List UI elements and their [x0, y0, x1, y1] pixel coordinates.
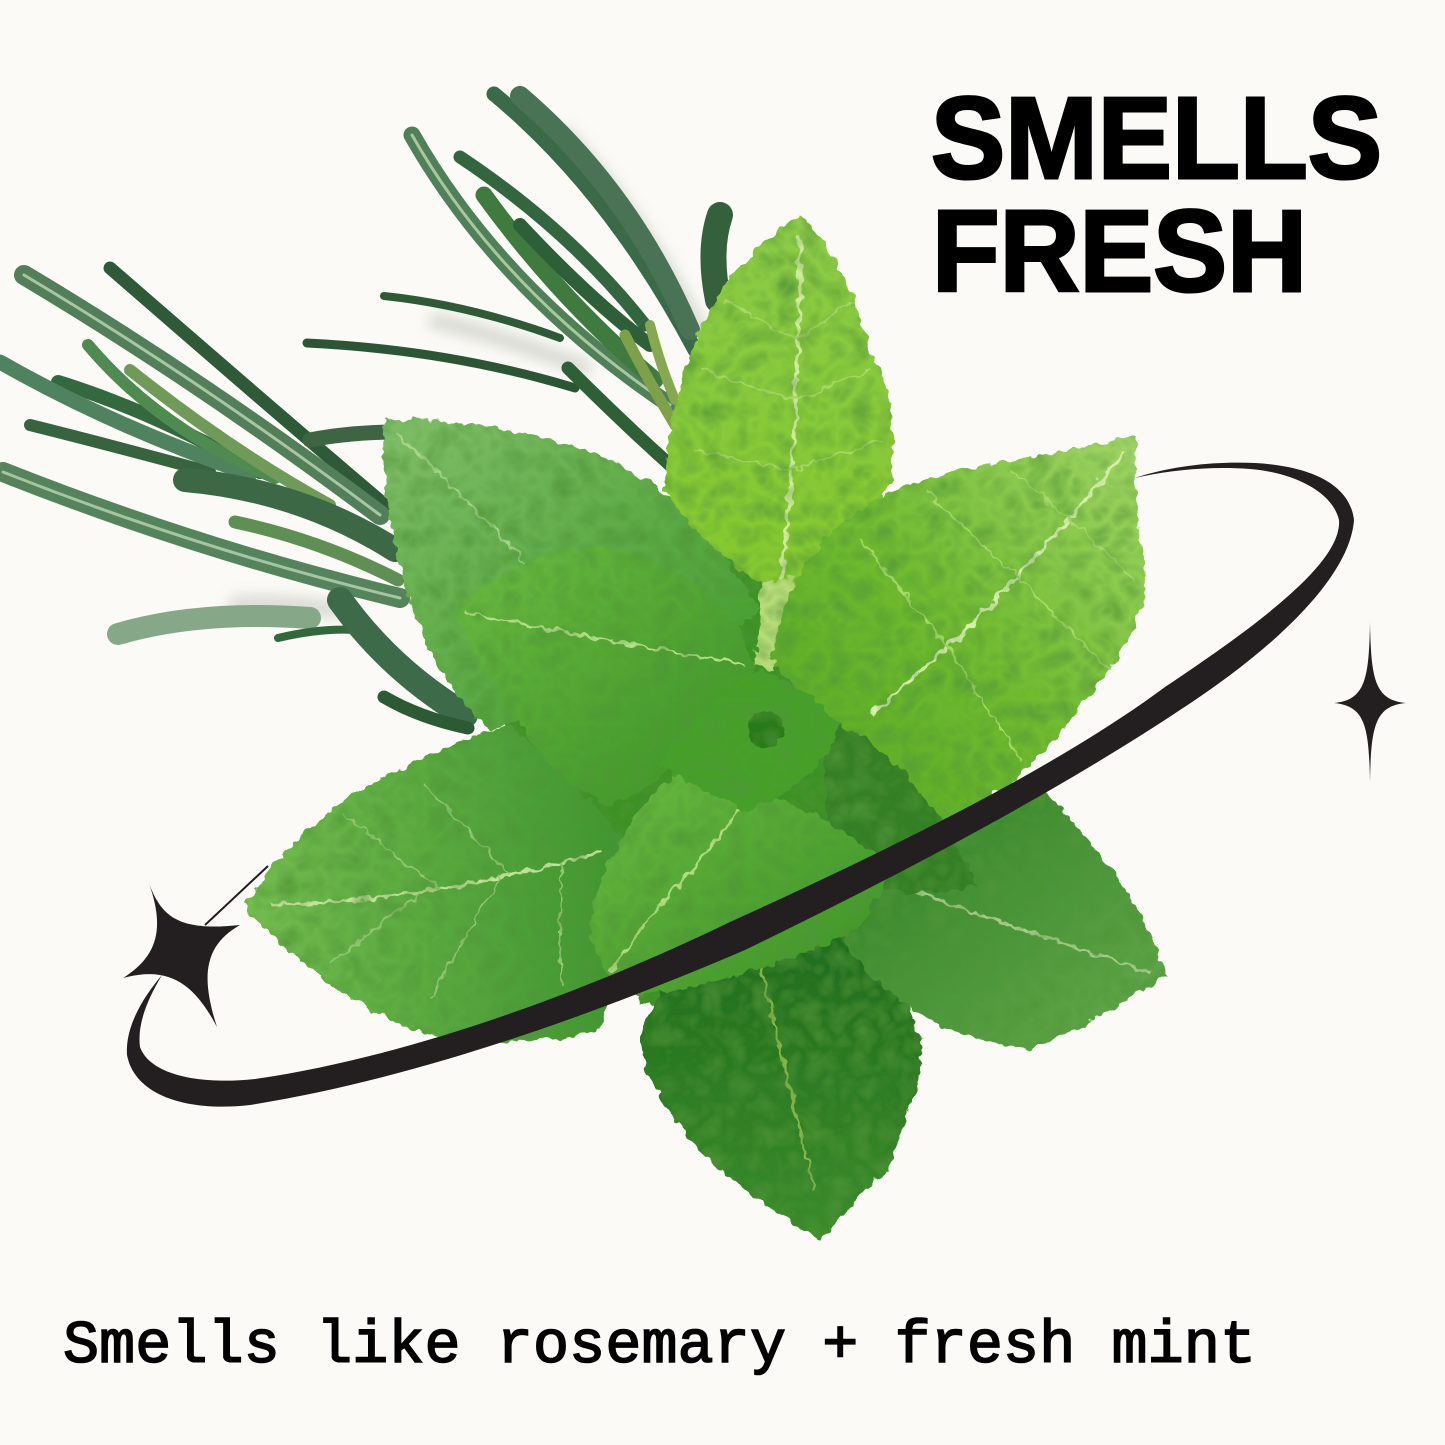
upper sprig needles: [307, 94, 720, 465]
leaf underlay: [470, 470, 980, 1005]
icon: large four-point star: [123, 878, 240, 1027]
caption: Smells like rosemary + fresh mint: [63, 1313, 1256, 1381]
rosemary sprigs: [0, 94, 720, 728]
leaf: right large: [772, 437, 1146, 825]
title: SMELLS: [931, 73, 1382, 203]
icon: small sparkle: [1334, 622, 1406, 782]
leaf: top: [665, 215, 894, 600]
leaf: dark right small: [823, 720, 977, 892]
leaf: center cluster: [660, 668, 838, 812]
stem: [755, 575, 795, 670]
leaf: lower right: [845, 780, 1167, 1050]
leaf: lower left: [243, 725, 630, 1042]
leaf: bottom dark: [640, 910, 922, 1240]
title: FRESH: [932, 186, 1307, 316]
mint leaves: [243, 215, 1167, 1240]
leaf: lower center: [590, 770, 886, 995]
thin ring link: [205, 866, 268, 925]
leaf: center left: [455, 547, 755, 805]
leaf: upper left: [384, 420, 760, 730]
left sprig needles: [0, 268, 468, 728]
needle shadows: [230, 130, 710, 612]
ring swoosh: [127, 463, 1354, 1107]
orbit ring: [127, 463, 1354, 1107]
